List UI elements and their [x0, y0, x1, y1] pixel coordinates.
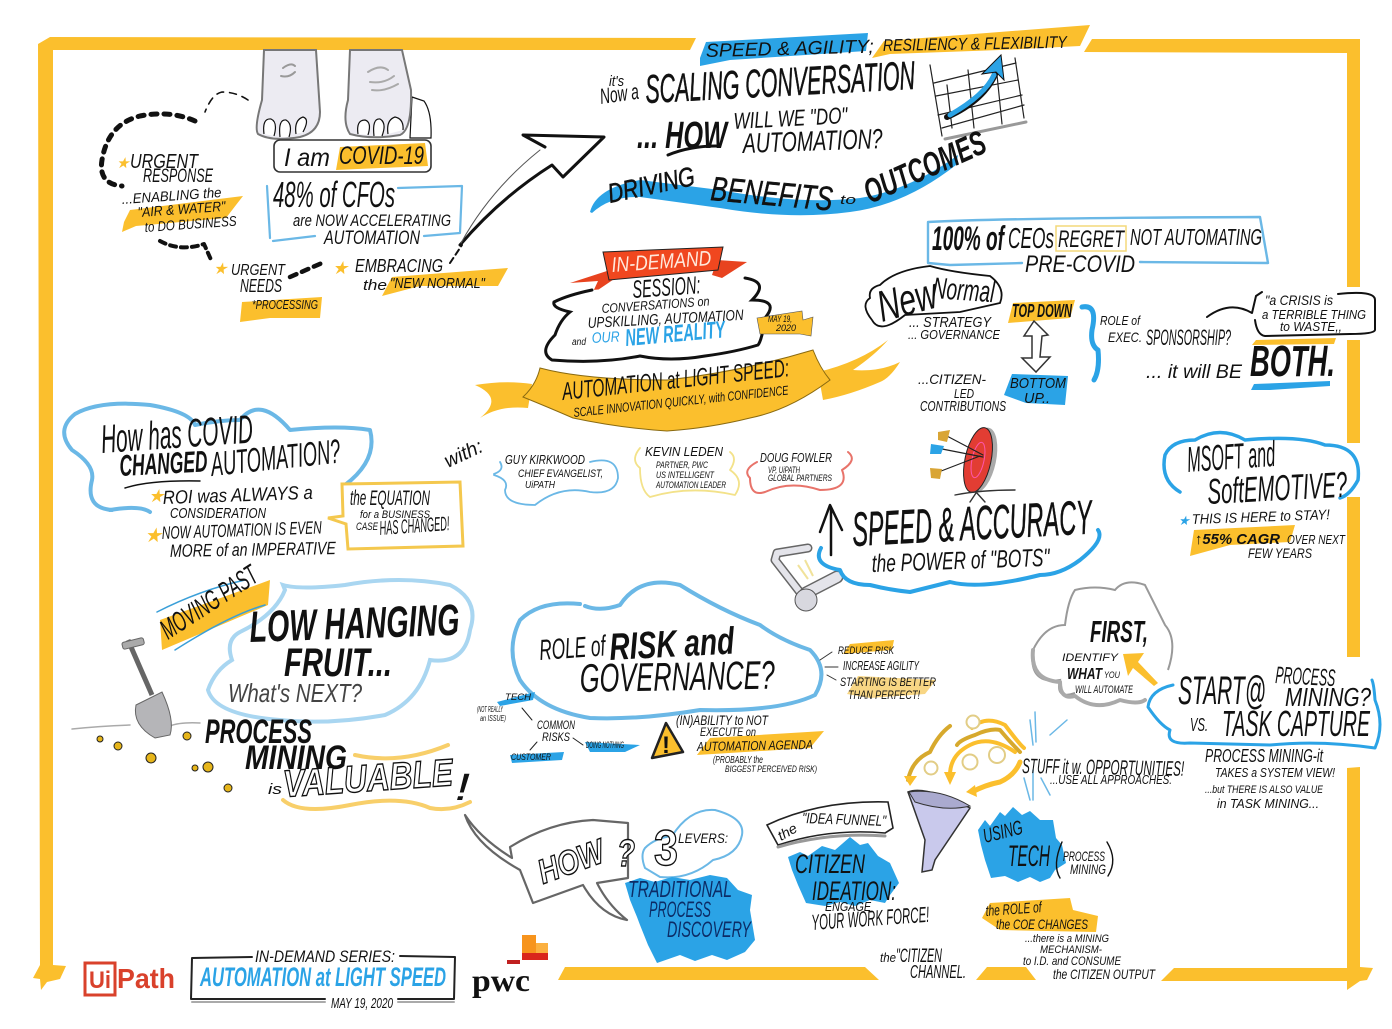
- text: the role of the COE changes: the CITIZEN OUTPUT: [1053, 966, 1156, 982]
- text: inability to execute on automation agenda: (PROBABLY the: [713, 755, 763, 766]
- text: process mining note: TAKES a SYSTEM VIEW!: [1215, 765, 1335, 780]
- cloud: start at process mining vs task capture: [1148, 662, 1380, 748]
- banner: the idea funnel: [767, 802, 893, 847]
- heading: scaling conversation: WILL WE "DO": [733, 102, 849, 134]
- text: inability to execute on automation agenda: [676, 712, 824, 774]
- stat box: 48% of CFOs: are NOW ACCELERATING: [293, 211, 451, 230]
- diagram: top down and bottom up: ... STRATEGY: [909, 314, 992, 331]
- text: here to stay and 55% CAGR: OVER NEXT: [1287, 532, 1346, 547]
- diagram: top down and bottom up: LED: [954, 386, 974, 401]
- cloud: start at process mining vs task capture: VS.: [1190, 715, 1208, 735]
- box: 100% of CEOs regret: 100% of: [932, 220, 1006, 258]
- heading: scaling conversation: [598, 54, 916, 159]
- cloud: low hanging fruit: FRUIT...: [284, 641, 392, 685]
- cloud: session description: UPSKILLING, AUTOMATION: [587, 307, 744, 332]
- cloud: low hanging fruit: [208, 580, 472, 722]
- diagram: common risks: RISKS: [542, 730, 570, 744]
- cloud: new normal: New: [872, 268, 945, 332]
- box: 100% of CEOs regret: PRE-COVID: [1025, 251, 1135, 278]
- cloud: role of risk and governance: [512, 582, 821, 718]
- presenters: with:: [441, 436, 486, 473]
- text: here to stay and 55% CAGR: ★: [1178, 513, 1191, 528]
- scribble: using tech: TECH: [1008, 840, 1050, 873]
- text: process mining note: in TASK MINING...: [1217, 796, 1319, 811]
- presenters: DOUG FOWLER: [760, 450, 832, 465]
- scribble: using tech: MINING: [1070, 861, 1106, 877]
- box: 100% of CEOs regret: [928, 217, 1268, 278]
- cloud: msoft and softemotive: MSOFT and: [1186, 433, 1277, 480]
- text: stuff it with opportunities: ...USE ALL APPROACHES.: [1050, 772, 1172, 787]
- heading: scaling conversation: it's: [609, 73, 624, 90]
- tag: date: [757, 311, 813, 336]
- speech bubble: a crisis is a terrible thing to waste: a TERRIBLE THING: [1262, 307, 1366, 322]
- speech bubble: a crisis is a terrible thing to waste: [1207, 292, 1375, 336]
- cloud: new normal: [865, 266, 1002, 332]
- illustration: light bulbs and yellow arrows: [904, 712, 1067, 800]
- cloud: session description: and: [572, 337, 586, 348]
- cloud: how has COVID changed automation: CHANGED: [119, 445, 208, 483]
- heading: process mining is valuable: MINING: [245, 739, 347, 777]
- diagram: top down and bottom up: ...CITIZEN-: [918, 371, 986, 387]
- logo: UiPath: Path: [117, 963, 175, 994]
- cloud: msoft and softemotive: [1164, 432, 1358, 512]
- diagram: common risks: DOING NOTHING: [586, 740, 624, 750]
- presenters: GUY KIRKWOOD: [505, 452, 585, 467]
- text: the role of the COE changes: the COE CHANGES: [996, 916, 1088, 932]
- list: reduce risk, increase agility, starting better: STARTING IS BETTER: [840, 675, 936, 689]
- list: ROI and imperative: [144, 483, 337, 561]
- speech bubble: how?: HOW: [533, 832, 612, 892]
- cloud: first identify what you will automate: YOU: [1104, 670, 1120, 680]
- cloud: session description: [546, 271, 770, 361]
- cloud: speed and accuracy: the POWER of "BOTS": [871, 544, 1051, 578]
- logo: pwc: [472, 935, 548, 998]
- text: stuff it with opportunities: [1022, 755, 1184, 787]
- icon: robot arm: [775, 548, 837, 611]
- text: here to stay and 55% CAGR: [1178, 506, 1346, 561]
- cloud: how has COVID changed automation: How has COVID: [100, 407, 254, 462]
- presenters: CHIEF EVANGELIST,: [518, 468, 603, 480]
- heading: scaling conversation: Now a: [598, 79, 640, 109]
- title box: in-demand series: IN-DEMAND SERIES:: [255, 947, 395, 966]
- stat box: 48% of CFOs: 48% of CFOs: [273, 174, 395, 215]
- diagram: top down and bottom up: UP..: [1024, 390, 1050, 407]
- icon: funnel: [908, 790, 970, 872]
- scribble: citizen ideation: CITIZEN: [795, 849, 865, 879]
- scribble: citizen ideation: IDEATION:: [812, 876, 896, 906]
- banner: speed and agility; resiliency and flexibility: [700, 25, 1090, 66]
- scribble: using tech: [978, 807, 1113, 882]
- speech bubble: how?: [465, 815, 635, 920]
- text: urgent response: ...ENABLING the: [121, 184, 222, 207]
- text: embracing the new normal: [332, 256, 508, 296]
- list: ROI and imperative: CONSIDERATION: [170, 505, 266, 522]
- text: the citizen channel: the: [880, 950, 896, 965]
- list: ROI and imperative: MORE of an IMPERATIVE: [170, 538, 337, 561]
- bracket and exec sponsorship text: SPONSORSHIP?: [1146, 325, 1231, 350]
- list: ROI and imperative: ROI was ALWAYS a: [162, 483, 313, 509]
- text: urgent response: ★: [116, 155, 131, 172]
- text: embracing the new normal: "NEW NORMAL": [390, 275, 486, 292]
- heading: scaling conversation: AUTOMATION?: [741, 123, 883, 159]
- list: reduce risk, increase agility, starting better: INCREASE AGILITY: [843, 658, 920, 673]
- scribble: traditional process discovery: PROCESS: [649, 897, 711, 922]
- up arrow: [820, 505, 842, 555]
- scale label: I am COVID-19: I am: [284, 144, 330, 172]
- callout: the equation has changed: [328, 482, 463, 549]
- scribble: traditional process discovery: DISCOVERY: [667, 917, 752, 942]
- diagram: common risks: TECH: [505, 692, 532, 702]
- cloud: how has COVID changed automation: AUTOMATION?: [208, 433, 342, 484]
- cloud: how has COVID changed automation: [64, 404, 372, 512]
- text: process mining note: ...but THERE IS ALSO VALUE: [1205, 784, 1324, 796]
- callout: the equation has changed: CASE: [356, 521, 378, 533]
- icon: growth chart: [930, 55, 1026, 139]
- heading: process mining is valuable: !: [455, 767, 471, 809]
- list: reduce risk, increase agility, starting better: [820, 640, 936, 702]
- cloud: session description: OUR: [591, 329, 620, 347]
- text: urgent response: to DO BUSINESS: [144, 213, 238, 235]
- cloud: low hanging fruit: LOW HANGING: [249, 596, 460, 652]
- logo: UiPath: [85, 963, 175, 995]
- text: here to stay and 55% CAGR: THIS IS HERE to STAY!: [1192, 506, 1330, 527]
- callout: the equation has changed: the EQUATION: [350, 487, 430, 510]
- diagram: top down and bottom up: ... GOVERNANCE: [908, 327, 1000, 342]
- list: reduce risk, increase agility, starting better: THAN PERFECT!: [848, 688, 920, 702]
- cloud: first identify what you will automate: WILL AUTOMATE: [1075, 684, 1133, 696]
- cloud: 3 levers: LEVERS:: [678, 830, 728, 846]
- cloud: speed and accuracy: [819, 491, 1100, 592]
- text: the citizen channel: CHANNEL.: [910, 962, 966, 982]
- text: the role of the COE changes: ...there is a MINING: [1025, 933, 1109, 945]
- banner: the idea funnel: "IDEA FUNNEL": [802, 810, 887, 830]
- text: process mining note: PROCESS MINING-it: [1205, 746, 1324, 766]
- text: here to stay and 55% CAGR: FEW YEARS: [1248, 545, 1313, 561]
- text: urgent response: "AIR & WATER": [137, 198, 227, 220]
- text: here to stay and 55% CAGR: ↑55% CAGR: [1195, 531, 1280, 548]
- box: 100% of CEOs regret: NOT AUTOMATING: [1130, 224, 1262, 250]
- text: urgent needs: URGENT: [231, 262, 286, 279]
- text: the citizen channel: "CITIZEN: [896, 946, 942, 967]
- presenters: UiPATH: [525, 480, 556, 491]
- text: inability to execute on automation agenda: AUTOMATION AGENDA: [696, 737, 813, 754]
- cloud: session description: CONVERSATIONS on: [601, 293, 710, 316]
- logo: pwc: pwc: [472, 962, 530, 998]
- bracket and exec sponsorship text: ROLE of: [1100, 313, 1141, 328]
- cloud: session description: SESSION:: [631, 271, 701, 304]
- heading: driving benefits to outcomes: [590, 124, 992, 219]
- stat box: 48% of CFOs: [267, 174, 462, 249]
- presenters: GLOBAL PARTNERS: [768, 473, 832, 483]
- cloud: session description: NEW REALITY: [624, 316, 727, 352]
- ribbon: automation at light speed: AUTOMATION at LIGHT SPEED:: [559, 354, 790, 406]
- heading: moving past: [154, 559, 270, 650]
- emphasis: both: [1250, 337, 1336, 390]
- banner: the idea funnel: the: [774, 820, 800, 844]
- list: ROI and imperative: NOW AUTOMATION IS EVEN: [161, 517, 323, 543]
- heading: process mining is valuable: PROCESS: [205, 713, 312, 751]
- speech bubble: how?: ?: [617, 833, 635, 875]
- text: urgent needs: NEEDS: [240, 276, 282, 296]
- bracket and exec sponsorship text: ... it will BE: [1146, 362, 1242, 383]
- scribble: using tech: PROCESS: [1063, 848, 1105, 864]
- speech bubble: a crisis is a terrible thing to waste: to WASTE,,: [1280, 319, 1342, 334]
- cloud: low hanging fruit: What's NEXT?: [228, 678, 362, 708]
- presenters: VP, UiPATH: [768, 465, 800, 475]
- ribbon: automation at light speed: [475, 340, 900, 431]
- heading: process mining is valuable: VALUABLE: [282, 752, 456, 806]
- text: urgent needs: *PROCESSING: [252, 297, 318, 312]
- text: urgent response: [116, 151, 243, 235]
- text: embracing the new normal: EMBRACING: [355, 256, 443, 276]
- diagram: common risks: COMMON: [537, 718, 575, 732]
- banner: speed and agility; resiliency and flexibility: RESILIENCY & FLEXIBILITY: [883, 33, 1068, 55]
- text: the citizen channel: [880, 946, 966, 982]
- heading: process mining is valuable: is: [268, 781, 283, 798]
- heading: scaling conversation: ... HOW: [637, 115, 729, 157]
- cloud: first identify what you will automate: FIRST,: [1090, 614, 1148, 649]
- cloud: start at process mining vs task capture: PROCESS: [1275, 662, 1336, 692]
- text: embracing the new normal: ★: [332, 258, 349, 278]
- cloud: role of risk and governance: RISK and: [608, 620, 736, 669]
- banner: speed and agility; resiliency and flexibility: SPEED & AGILITY;: [706, 37, 874, 62]
- scale label: I am COVID-19: COVID-19: [339, 142, 424, 170]
- diagram: common risks: [477, 692, 640, 763]
- cloud: role of risk and governance: GOVERNANCE?: [579, 654, 776, 701]
- heading: driving benefits to outcomes: DRIVING: [605, 161, 697, 209]
- text: process mining note: [1205, 746, 1335, 811]
- diagram: top down and bottom up: TOP DOWN: [1012, 301, 1073, 321]
- box: 100% of CEOs regret: REGRET: [1058, 226, 1126, 253]
- heading: scaling conversation: SCALING CONVERSATION: [644, 54, 916, 112]
- icon: shovel and dirt: [72, 637, 232, 792]
- presenters: KEVIN LEDEN: [645, 444, 724, 459]
- bracket and exec sponsorship text: [1082, 307, 1242, 383]
- text: urgent response: URGENT: [130, 151, 199, 173]
- title box: in-demand series: MAY 19, 2020: [331, 995, 393, 1012]
- cloud: start at process mining vs task capture: START@: [1178, 669, 1266, 713]
- heading: driving benefits to outcomes: OUTCOMES: [858, 124, 992, 211]
- diagram: common risks: an ISSUE): [480, 714, 506, 723]
- text: the role of the COE changes: to I.D. and CONSUME: [1023, 954, 1122, 968]
- text: embracing the new normal: the: [363, 277, 387, 294]
- diagram: top down and bottom up: BOTTOM: [1010, 375, 1066, 392]
- tag: date: 2020: [775, 323, 796, 333]
- heading: driving benefits to outcomes: BENEFITS: [709, 170, 834, 219]
- presenters: AUTOMATION LEADER: [655, 480, 726, 490]
- title box: in-demand series: [191, 947, 455, 1012]
- title box: in-demand series: AUTOMATION at LIGHT SPEED: [199, 962, 446, 992]
- arrow: large upward arrow: [460, 130, 605, 245]
- diagram: common risks: CUSTOMER: [511, 752, 551, 762]
- callout: the equation has changed: for a BUSINESS: [360, 509, 431, 521]
- cloud: new normal: Normal: [932, 272, 997, 309]
- scribble: citizen ideation: [788, 837, 930, 935]
- diagram: common risks: (NOT REALLY: [477, 705, 503, 714]
- list: ROI and imperative: ★: [148, 486, 165, 506]
- diagram: top down and bottom up: [908, 300, 1075, 415]
- logo: UiPath: Ui: [89, 967, 111, 994]
- stat box: 48% of CFOs: AUTOMATION: [323, 228, 420, 249]
- ribbon: automation at light speed: SCALE INNOVATION QUICKLY, with CONFIDENCE: [573, 382, 789, 420]
- text: urgent needs: ★: [213, 261, 229, 278]
- list: reduce risk, increase agility, starting better: REDUCE RISK: [838, 645, 894, 657]
- diagram: top down and bottom up: CONTRIBUTIONS: [920, 398, 1006, 415]
- presenters: [441, 436, 852, 505]
- dashed path connecting milestones: [101, 92, 462, 277]
- heading: moving past: MOVING PAST: [154, 559, 264, 645]
- illustration: feet on scale: [257, 50, 431, 139]
- scribble: citizen ideation: YOUR WORK FORCE!: [811, 902, 930, 935]
- text: the role of the COE changes: MECHANISM-: [1040, 944, 1102, 956]
- cloud: role of risk and governance: ROLE of: [538, 630, 608, 667]
- cloud: speed and accuracy: SPEED & ACCURACY: [851, 491, 1095, 557]
- text: the role of the COE changes: the ROLE of: [985, 899, 1043, 920]
- text: inability to execute on automation agenda: BIGGEST PERCEIVED RISK): [725, 764, 817, 774]
- scribble: traditional process discovery: [625, 875, 755, 963]
- text: inability to execute on automation agenda: (IN)ABILITY to NOT: [676, 712, 769, 728]
- callout: the equation has changed: HAS CHANGED!: [379, 513, 450, 540]
- scribble: using tech: USING: [981, 817, 1025, 848]
- icon: target with arrows: [930, 425, 1015, 502]
- text: the role of the COE changes: [982, 898, 1156, 982]
- heading: driving benefits to outcomes: to: [840, 192, 856, 207]
- box: 100% of CEOs regret: CEOs: [1008, 223, 1054, 255]
- text: urgent needs: [213, 261, 322, 322]
- cloud: first identify what you will automate: WHAT: [1067, 666, 1103, 683]
- scribble: traditional process discovery: TRADITIONAL: [628, 876, 732, 902]
- tag: date: MAY 19,: [768, 314, 792, 324]
- text: inability to execute on automation agenda: EXECUTE on: [700, 725, 756, 739]
- cloud: start at process mining vs task capture: MINING?: [1285, 682, 1371, 712]
- bracket and exec sponsorship text: EXEC.: [1108, 329, 1142, 345]
- icon: warning triangle: !: [662, 732, 670, 759]
- cloud: 3 levers: 3: [654, 820, 678, 876]
- heading: process mining is valuable: [205, 713, 471, 809]
- cloud: first identify what you will automate: [1032, 582, 1172, 705]
- ribbon: in-demand: IN-DEMAND: [611, 247, 712, 277]
- cloud: 3 levers: [642, 810, 742, 877]
- text: stuff it with opportunities: STUFF it w. OPPORTUNITIES!: [1022, 755, 1184, 781]
- presenters: US INTELLIGENT: [656, 470, 715, 480]
- presenters: PARTNER, PWC: [656, 460, 708, 470]
- speech bubble: a crisis is a terrible thing to waste: "a CRISIS is: [1265, 292, 1333, 308]
- cloud: first identify what you will automate: IDENTIFY: [1062, 652, 1119, 664]
- emphasis: both: BOTH.: [1250, 337, 1335, 386]
- list: ROI and imperative: ★: [144, 525, 163, 547]
- scale label: I am COVID-19: [274, 140, 431, 172]
- icon: warning triangle: [652, 723, 683, 759]
- ribbon: in-demand: [570, 247, 747, 294]
- scribble: citizen ideation: ENGAGE: [825, 899, 871, 914]
- text: urgent response: RESPONSE: [143, 166, 213, 187]
